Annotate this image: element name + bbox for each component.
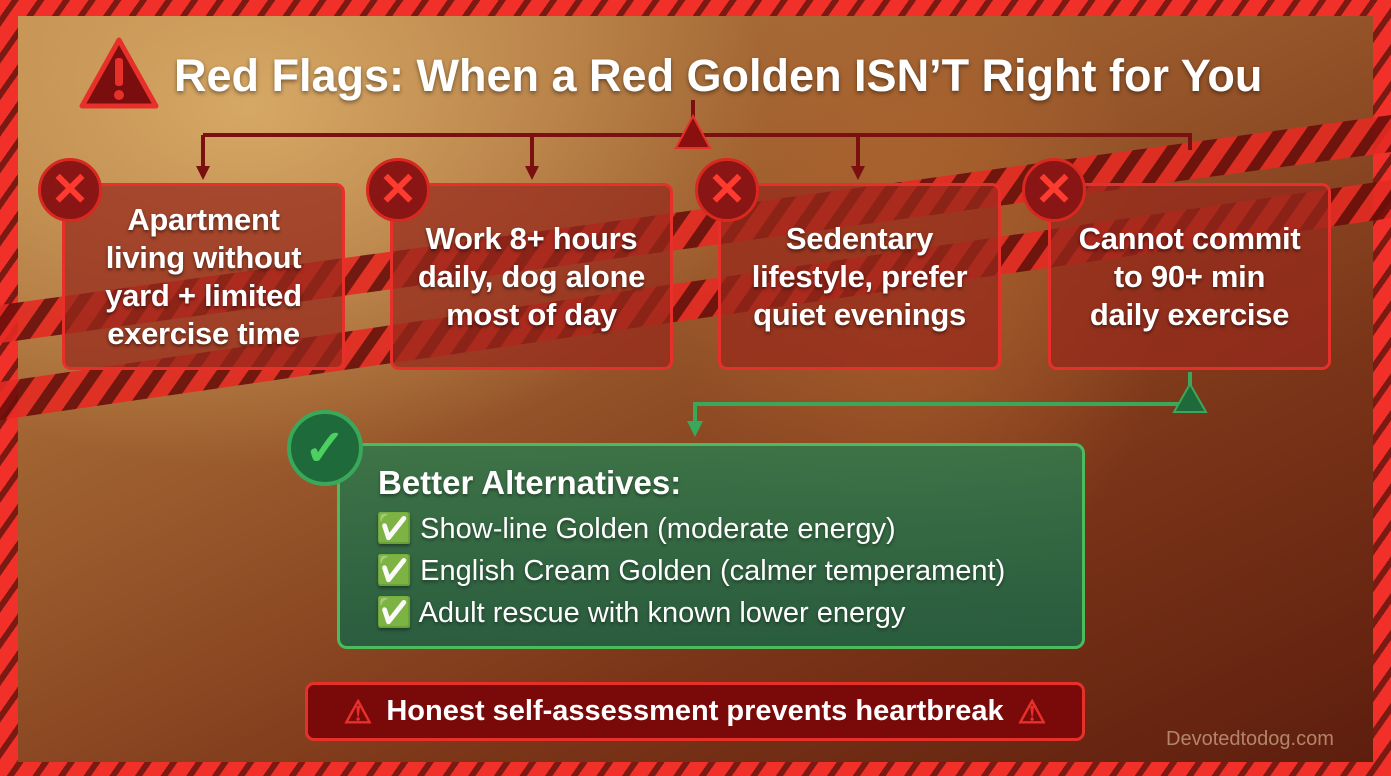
card 1 xyxy=(62,183,345,370)
watermark: Devotedtodog.com xyxy=(1166,728,1334,750)
icon: x 1 xyxy=(38,158,102,222)
card 4: Cannot commit xyxy=(1079,220,1300,256)
card 2 xyxy=(390,183,673,370)
icon: check circle: ✓ xyxy=(304,420,346,476)
heading: Better Alternatives: xyxy=(378,464,681,501)
icon: x 4: ✕ xyxy=(1035,163,1073,215)
callout banner: ⚠ xyxy=(1018,694,1046,730)
card 3: quiet evenings xyxy=(753,296,966,332)
card 1: exercise time xyxy=(107,316,300,350)
card 3: lifestyle, prefer xyxy=(752,258,967,294)
card 2: most of day xyxy=(446,296,617,332)
card 3 xyxy=(718,183,1001,370)
card 1: Apartment xyxy=(127,202,280,236)
icon: x 3 xyxy=(695,158,759,222)
icon: warning triangle xyxy=(80,38,158,108)
icon: x 2 xyxy=(366,158,430,222)
list xyxy=(376,512,1005,632)
list: ✅ Show-line Golden (moderate energy) xyxy=(376,513,896,545)
card 3: Sedentary xyxy=(786,220,933,256)
card 4 xyxy=(1048,183,1331,370)
card 4: to 90+ min xyxy=(1114,258,1265,294)
card 1: living without xyxy=(106,240,301,274)
callout banner: Honest self-assessment prevents heartbreak xyxy=(386,695,1004,727)
list: ✅ English Cream Golden (calmer temperament) xyxy=(376,555,1005,587)
icon: x 1: ✕ xyxy=(51,163,89,215)
icon: x 3: ✕ xyxy=(708,163,746,215)
icon: x 4 xyxy=(1022,158,1086,222)
card 2: daily, dog alone xyxy=(418,258,645,294)
callout banner: ⚠ xyxy=(344,694,372,730)
panel: better alternatives xyxy=(337,443,1085,649)
icon: x 2: ✕ xyxy=(379,163,417,215)
title: Red Flags: When a Red Golden ISN’T Right for You xyxy=(174,50,1262,101)
card 2: Work 8+ hours xyxy=(426,220,637,256)
callout banner xyxy=(305,682,1085,741)
title xyxy=(80,38,1262,108)
icon: check circle xyxy=(287,410,363,486)
card 1: yard + limited xyxy=(105,278,302,312)
card 4: daily exercise xyxy=(1090,296,1289,332)
list: ✅ Adult rescue with known lower energy xyxy=(376,597,905,629)
